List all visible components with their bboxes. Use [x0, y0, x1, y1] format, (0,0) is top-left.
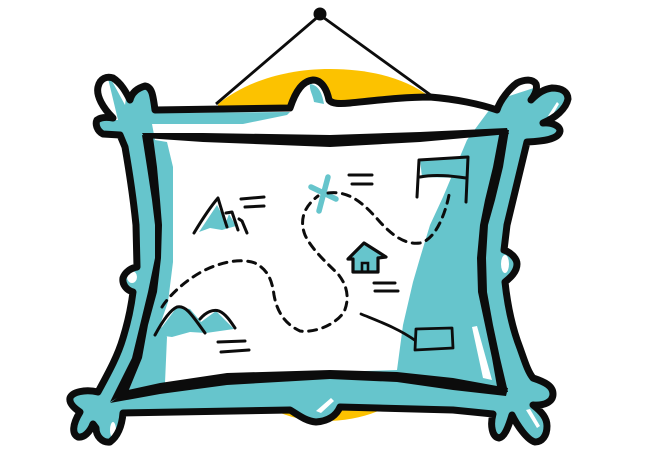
- map icon: upper mountain: [194, 198, 247, 233]
- dashed treasure route: [162, 193, 449, 331]
- map icon: lower mountains: [155, 307, 235, 337]
- inner frame top: [142, 128, 509, 147]
- map text lines: X note: [349, 175, 372, 184]
- illustration: framed treasure map: [66, 8, 572, 446]
- pointer line to label box: [361, 314, 416, 341]
- map icon: house: [348, 243, 386, 272]
- inner frame right: [477, 130, 509, 392]
- map marker: X: [311, 177, 336, 211]
- yellow sun behind the frame: [218, 69, 430, 421]
- inner frame: [110, 128, 509, 403]
- map text lines: house note: [374, 283, 398, 291]
- frame body: [70, 77, 568, 442]
- inner frame bottom: [110, 370, 508, 403]
- right rail, bottom rail and right map shadow: [77, 88, 564, 439]
- map text lines: mountain note: [241, 197, 264, 207]
- teal frame paint and map shading: [73, 80, 564, 439]
- hanging wire and nail: [216, 8, 432, 104]
- map icon: flag: [417, 157, 468, 202]
- teal bump on top of frame: [310, 84, 324, 104]
- map text lines: lower mountain note: [218, 341, 249, 352]
- left rail, top-left corner and map sliver: [74, 80, 290, 398]
- frame outline: [70, 77, 568, 442]
- white highlights: [110, 102, 559, 438]
- inner frame left: [110, 135, 162, 402]
- label box: [415, 328, 453, 350]
